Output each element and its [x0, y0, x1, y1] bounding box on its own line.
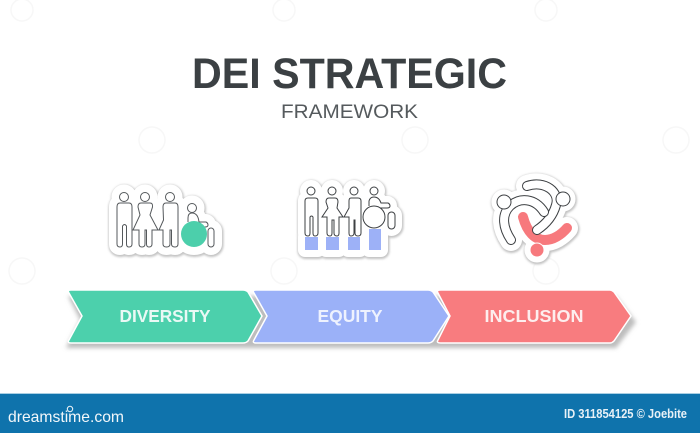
arrow: equity: EQUITY — [318, 306, 383, 326]
equity bars — [305, 229, 381, 250]
footer bar — [0, 393, 700, 433]
footer logo: dreamstime.com — [8, 409, 124, 426]
arrow: inclusion — [437, 290, 631, 343]
watermark rings — [9, 0, 689, 284]
arrow: diversity: DIVERSITY — [120, 306, 211, 326]
icon: equity people — [305, 187, 396, 251]
subtitle: FRAMEWORK — [281, 101, 418, 123]
red arc — [523, 217, 567, 240]
arrow shadows — [66, 296, 636, 348]
arrow: diversity — [68, 290, 262, 343]
arrow: equity — [253, 290, 449, 343]
green wheel — [181, 221, 207, 247]
title: DEI STRATEGIC — [192, 50, 507, 98]
arrow: inclusion: INCLUSION — [484, 306, 584, 326]
footer image id: ID 311854125 © Joebite — [564, 407, 687, 421]
icon: diversity people — [117, 192, 214, 248]
icon: inclusion circle of people — [492, 184, 576, 264]
logo mark — [67, 406, 73, 412]
